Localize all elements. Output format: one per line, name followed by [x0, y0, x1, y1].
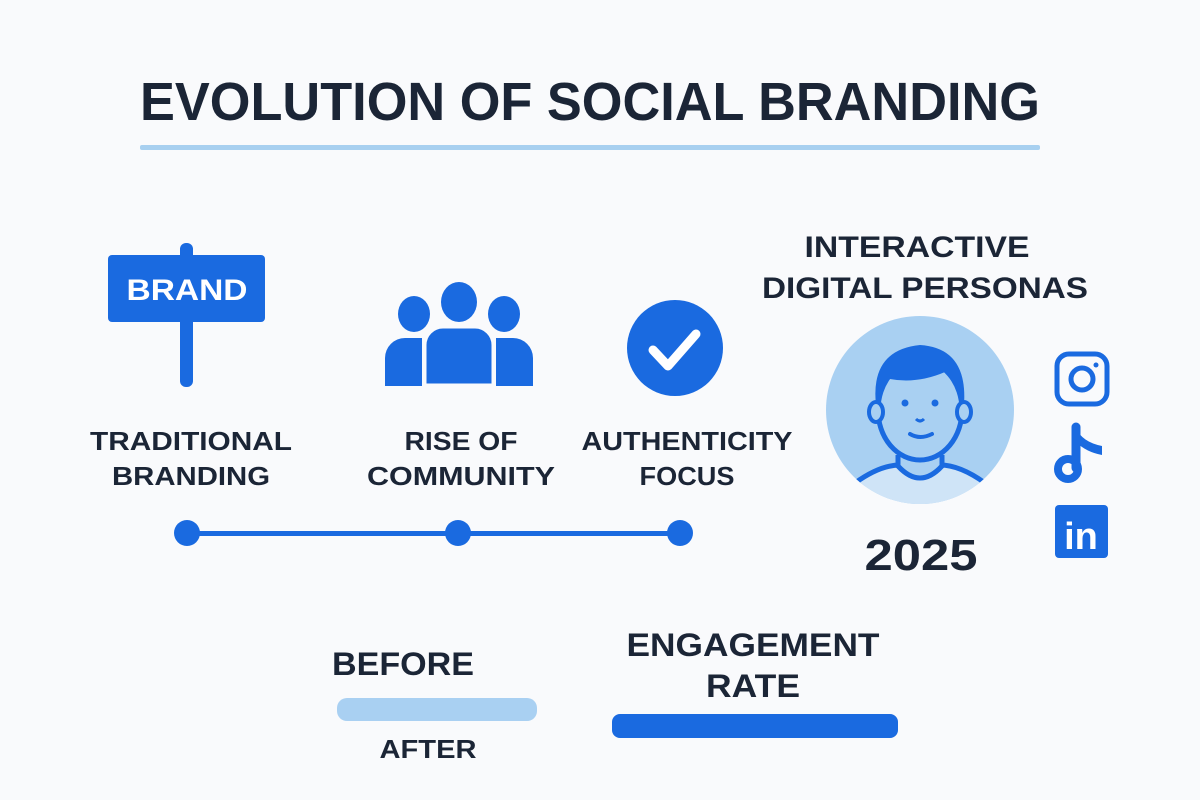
- label: before: BEFORE: [332, 646, 474, 682]
- timeline: [174, 520, 693, 546]
- icon: linkedin: [1055, 505, 1108, 558]
- label: traditional branding: BRANDING: [112, 461, 270, 491]
- year: 2025: [864, 531, 978, 580]
- label: authenticity focus: AUTHENTICITY: [582, 426, 792, 456]
- icon: instagram: [1057, 354, 1107, 404]
- heading: interactive digital personas: [762, 231, 1088, 305]
- bar: after: [612, 714, 898, 738]
- label: traditional branding: [90, 426, 292, 491]
- label: after: AFTER: [380, 734, 477, 764]
- icon: tiktok: [1058, 427, 1102, 479]
- bar: before: [337, 698, 537, 721]
- icon: brand sign: BRAND: [126, 274, 248, 307]
- label: engagement rate: [626, 627, 880, 704]
- icon: check circle: [627, 300, 723, 396]
- icon: brand sign: [108, 243, 265, 387]
- heading: interactive digital personas: DIGITAL PERSONAS: [762, 272, 1088, 305]
- icon: linkedin: in: [1064, 516, 1098, 558]
- label: rise of community: RISE OF: [404, 426, 518, 456]
- label: rise of community: COMMUNITY: [367, 461, 555, 491]
- label: traditional branding: TRADITIONAL: [90, 426, 292, 456]
- label: engagement rate: ENGAGEMENT: [626, 627, 880, 663]
- icon: community: [385, 282, 533, 386]
- label: authenticity focus: FOCUS: [640, 461, 734, 491]
- label: engagement rate: RATE: [706, 668, 800, 704]
- title: EVOLUTION OF SOCIAL BRANDING: [140, 72, 1040, 132]
- icon: avatar: [826, 316, 1014, 520]
- label: authenticity focus: [582, 426, 792, 491]
- label: rise of community: [367, 426, 555, 491]
- heading: interactive digital personas: INTERACTIVE: [804, 231, 1030, 264]
